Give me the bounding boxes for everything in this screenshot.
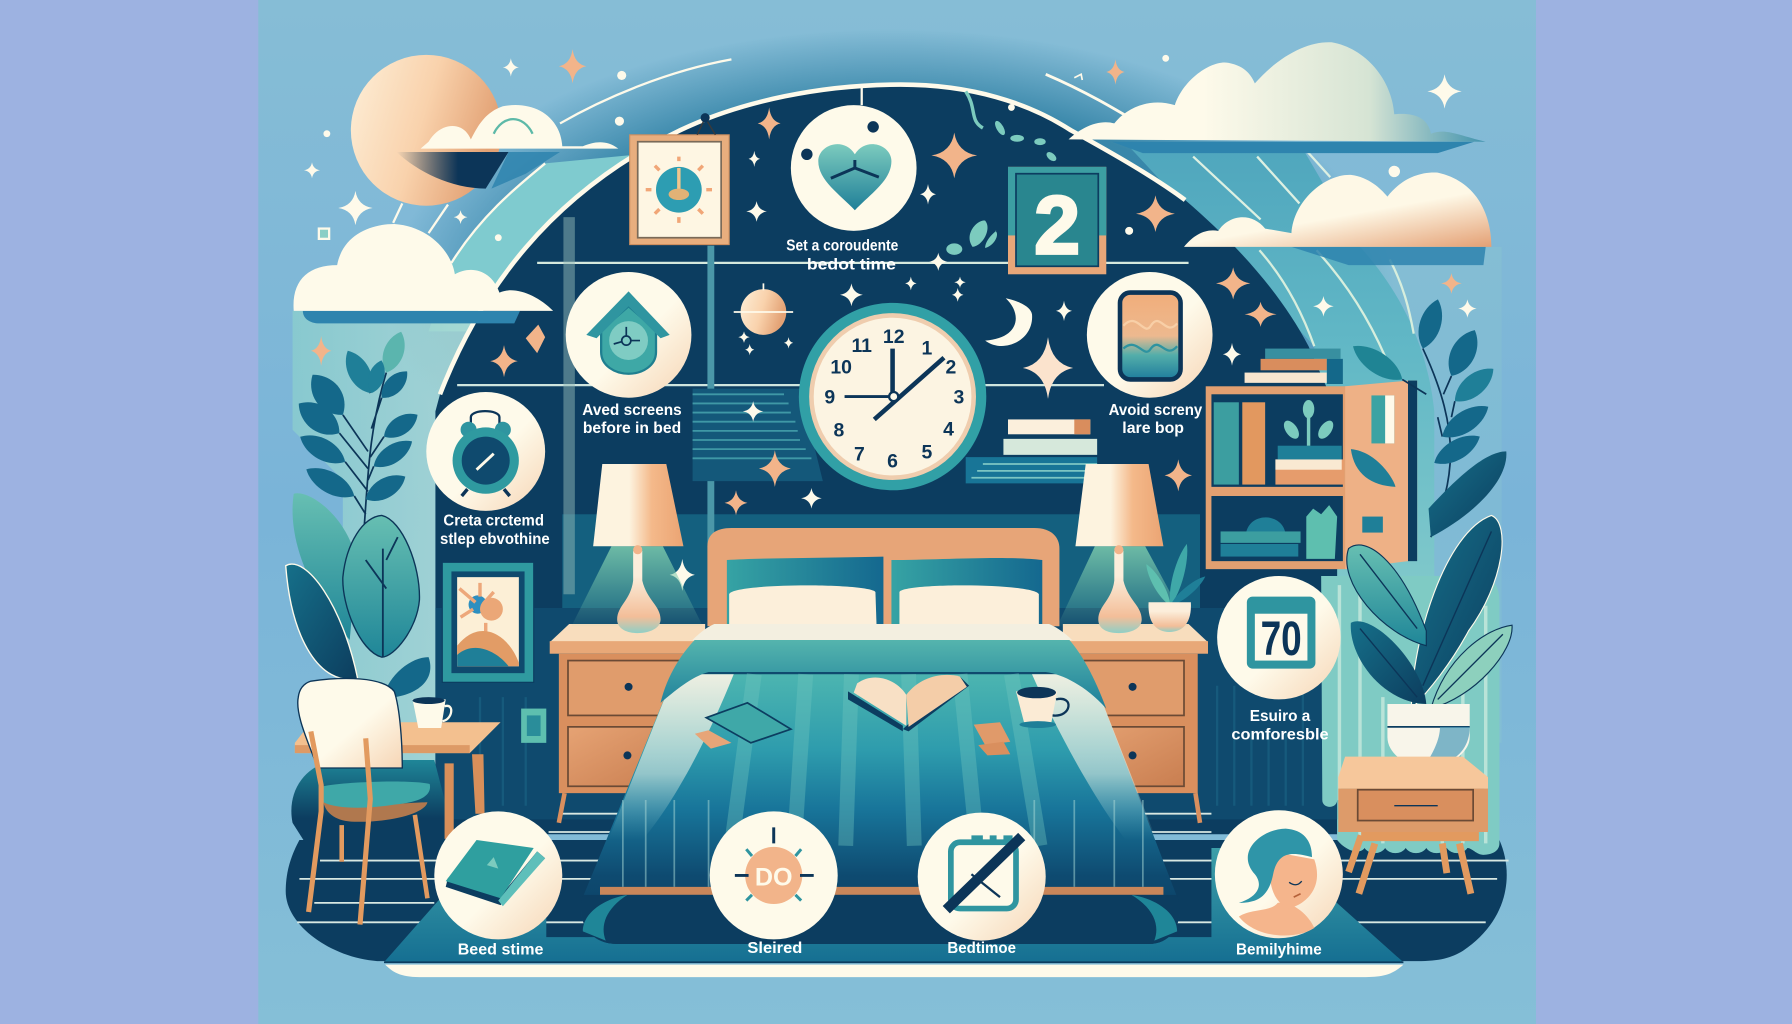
icon circle: heart	[791, 105, 917, 231]
label: avoid screens right: lare bop	[1122, 420, 1184, 437]
mint strip behind left plant	[293, 311, 480, 800]
bed	[581, 528, 1180, 944]
wall clock: 3	[953, 386, 964, 408]
icon circle: alarm clock	[426, 392, 545, 511]
label: create routine: stlep ebvothine	[440, 531, 550, 548]
icon circle: phone	[1087, 272, 1213, 398]
dark room under arch	[435, 85, 1338, 834]
frame: number 2: 2	[1034, 181, 1080, 272]
sparkles peach	[311, 49, 1462, 515]
plant right: large leaves	[1347, 515, 1512, 709]
side table with cup	[295, 697, 501, 839]
nightstand left	[550, 624, 705, 823]
frame: number 2	[1008, 167, 1106, 274]
icon circle: thermostat 70: 70	[1261, 613, 1302, 666]
sparkles cream	[304, 55, 1477, 591]
notebook on bed	[695, 703, 791, 749]
label: set a consistent bedtime: bedot time	[807, 257, 896, 274]
small potted plant	[1142, 543, 1208, 632]
lamp left	[571, 464, 703, 633]
small square deco	[319, 229, 329, 239]
sun	[351, 55, 560, 206]
label: create routine	[440, 513, 550, 548]
wall clock: 4	[943, 418, 954, 440]
icon circle: DO timer	[710, 811, 838, 939]
big star	[1023, 337, 1073, 399]
label: create routine: Creta crctemd	[443, 513, 544, 530]
label: set a consistent bedtime: Set a coroudente	[786, 237, 898, 254]
potted plant pot	[1387, 704, 1470, 768]
lamp right	[1057, 464, 1189, 633]
wall clock	[799, 303, 986, 490]
rainbow arcs left	[393, 59, 731, 331]
headboard	[707, 528, 1059, 626]
label: avoid screens right: Avoid screny	[1109, 402, 1202, 419]
wall clock: 8	[833, 420, 844, 442]
wall clock: 7	[854, 444, 865, 466]
label: set a consistent bedtime	[786, 237, 898, 274]
cloud on sun	[377, 105, 618, 149]
icon circle: sleeping woman	[1215, 810, 1343, 938]
stripes	[731, 674, 1040, 846]
blanket	[581, 674, 1180, 944]
plant right: upper branch	[1347, 296, 1506, 537]
wall clock: 12	[883, 326, 905, 348]
frame: sun picture	[630, 113, 729, 245]
label: avoid screens left: Aved screens	[582, 402, 682, 419]
open book on bed	[848, 675, 969, 731]
bottom label: sleired: Sleired	[747, 940, 802, 957]
teal carpet	[384, 848, 1403, 977]
wall clock: 5	[921, 441, 932, 463]
cup on bed	[1016, 687, 1069, 728]
bottom label: bedtimoe: Bedtimoe	[947, 940, 1016, 957]
icon circle: thermostat 70	[1217, 576, 1341, 699]
label: avoid screens right	[1109, 402, 1202, 437]
hanging vine with leaves	[946, 91, 1058, 255]
pillows	[727, 557, 883, 625]
chair	[298, 678, 430, 925]
label: avoid screens left	[582, 402, 682, 437]
wall clock: 1	[921, 337, 932, 359]
plant left: large leaves	[286, 493, 430, 698]
stack of books on wall shelf	[966, 419, 1097, 483]
cream shoulders	[608, 674, 734, 840]
frame: landscape picture	[442, 562, 534, 682]
bookshelf	[1206, 349, 1417, 569]
bottom label: bemilyhime: Bemilyhime	[1236, 941, 1322, 958]
wall switch	[521, 709, 546, 743]
bottom label: bed stime: Beed stime	[458, 941, 544, 958]
bottom edge	[600, 887, 1163, 895]
fold	[661, 624, 1106, 709]
plant left: slim branch	[291, 328, 423, 537]
floor	[286, 760, 1509, 961]
icon circle: DO timer: DO	[755, 864, 793, 892]
moon	[985, 298, 1032, 346]
wall clock: 9	[824, 386, 835, 408]
wall clock: 11	[851, 335, 872, 357]
rainbow arcs right	[1046, 74, 1502, 743]
right curtain	[1321, 576, 1499, 855]
right stand	[1338, 757, 1488, 894]
icon circle: book	[434, 811, 562, 939]
icon circle: house clock	[566, 272, 691, 398]
wall clock: 6	[887, 450, 898, 472]
cloud upper right	[1069, 42, 1486, 153]
label: ensure a comfortable: comforesble	[1231, 726, 1329, 743]
label: ensure a comfortable	[1231, 708, 1329, 743]
cloud left	[294, 224, 553, 323]
wall clock: 2	[945, 357, 956, 379]
cards on bed	[974, 722, 1010, 755]
label: avoid screens left: before in bed	[583, 420, 681, 437]
icon circle: crossed device	[918, 813, 1046, 941]
wall clock: 10	[830, 357, 852, 379]
label: ensure a comfortable: Esuiro a	[1250, 708, 1310, 725]
nightstand right	[1063, 624, 1208, 823]
cloud mid right	[1184, 172, 1491, 265]
planet	[734, 283, 793, 335]
